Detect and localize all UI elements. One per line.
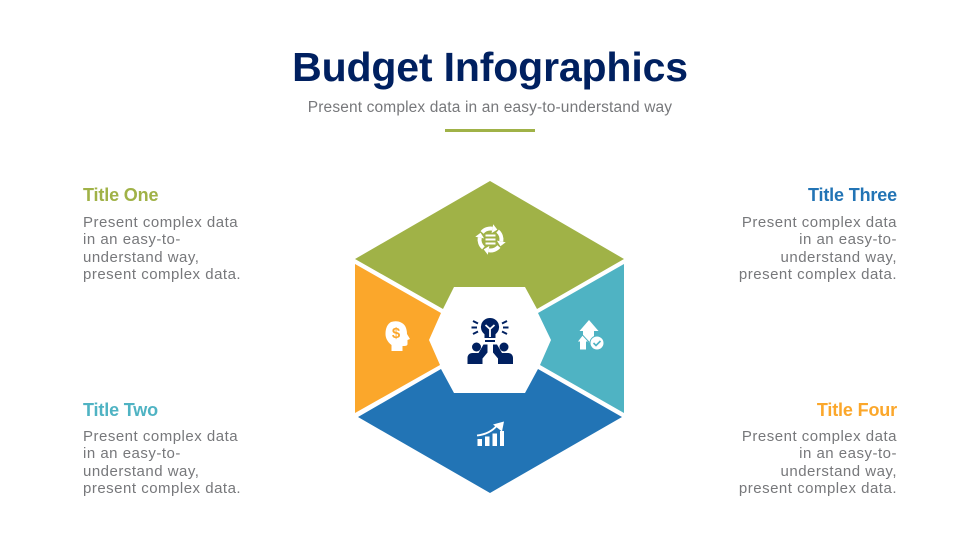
body: title one: in an easy-to- <box>83 231 181 248</box>
body: title two: present complex data. <box>83 480 241 497</box>
body: title four: Present complex data <box>742 428 897 445</box>
title: Budget Infographics <box>292 44 688 90</box>
heading: title two: Title Two <box>83 400 158 420</box>
icon: head with dollar: $ <box>392 325 401 342</box>
heading: title four: Title Four <box>817 400 897 420</box>
body: title four: in an easy-to- <box>799 445 897 462</box>
body: title one: understand way, <box>83 249 199 266</box>
heading: title three: Title Three <box>808 185 897 205</box>
body: title three: present complex data. <box>739 266 897 283</box>
body: title three: Present complex data <box>742 214 897 231</box>
body: title one <box>83 214 241 283</box>
segment: orange left <box>355 264 441 413</box>
body: title two: understand way, <box>83 463 199 480</box>
body: title three: understand way, <box>781 249 897 266</box>
body: title two: in an easy-to- <box>83 445 181 462</box>
body: title three: in an easy-to- <box>799 231 897 248</box>
icon: cycle with list <box>475 224 506 255</box>
icon: head with dollar <box>386 321 410 351</box>
text block: title two <box>83 400 241 497</box>
title underline <box>445 129 535 132</box>
segment: teal right <box>538 264 624 413</box>
body: title one: Present complex data <box>83 214 238 231</box>
icon: arrows with check <box>577 320 604 350</box>
body: title two <box>83 428 241 497</box>
text block: title three <box>739 185 897 283</box>
subtitle: Present complex data in an easy-to-understand way <box>308 99 672 116</box>
icon: growth chart <box>477 422 504 446</box>
body: title three <box>739 214 897 283</box>
body: title one: present complex data. <box>83 266 241 283</box>
body: title four <box>739 428 897 497</box>
body: title four: present complex data. <box>739 480 897 497</box>
text block: title one <box>83 185 241 283</box>
segment: green top <box>355 181 624 309</box>
body: title two: Present complex data <box>83 428 238 445</box>
icon: people with lightbulb <box>468 318 513 364</box>
body: title four: understand way, <box>781 463 897 480</box>
text block: title four <box>739 400 897 497</box>
heading: title one: Title One <box>83 185 158 205</box>
segment: blue bottom <box>358 369 622 493</box>
